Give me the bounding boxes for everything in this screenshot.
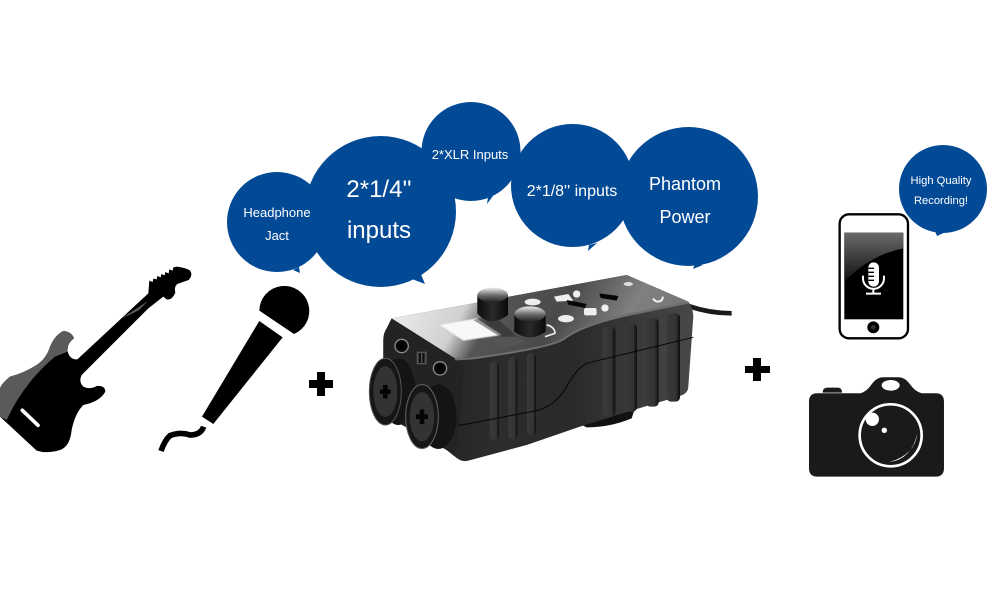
speech bubble: Phantom Power: Power [659, 207, 711, 227]
icon: camera [809, 377, 944, 477]
audio adapter device [369, 275, 732, 461]
icon: microphone [161, 286, 309, 451]
speech bubble: High Quality Recording [899, 145, 987, 236]
device body [383, 275, 693, 461]
speech bubble: Headphone Jact: Headphone [243, 205, 311, 220]
speech bubble: Phantom Power [619, 127, 758, 269]
speech bubble: 2*1/4 inputs: inputs [347, 217, 411, 244]
cable [688, 306, 732, 313]
body seam [458, 337, 693, 426]
icon: plus between adapter and devices [745, 358, 770, 381]
speech bubble: High Quality Recording: High Quality [911, 175, 972, 187]
XLR connector left [369, 358, 416, 425]
panel labels and controls [440, 282, 663, 348]
XLR connector right [406, 384, 457, 449]
icon: electric guitar [0, 267, 191, 452]
icon: plus between microphone and adapter [309, 372, 333, 396]
speech bubble: 2*1/8 inputs [511, 124, 634, 251]
front face [383, 318, 464, 457]
icon: smartphone [840, 214, 908, 338]
volume knob front [514, 306, 546, 337]
speech bubble: Headphone Jact [227, 172, 327, 273]
front panel controls [395, 339, 447, 375]
speech bubble: 2*1/8 inputs: 2*1/8'' inputs [527, 183, 617, 200]
top panel edge highlight [455, 303, 688, 359]
speech bubble: 2*XLR Inputs: 2*XLR Inputs [432, 147, 509, 162]
microphone symbol [863, 262, 884, 294]
speech bubble: Phantom Power: Phantom [649, 174, 721, 194]
volume knob back [477, 288, 508, 321]
body ribs [490, 313, 680, 440]
top panel [392, 275, 688, 358]
speech bubble: 2*XLR Inputs [422, 102, 520, 204]
speech bubble: 2*1/4 inputs [305, 136, 456, 287]
speech bubble: 2*1/4 inputs: 2*1/4'' [346, 176, 412, 203]
speech bubble: Headphone Jact: Jact [265, 228, 289, 243]
speech bubble: High Quality Recording: Recording! [914, 195, 968, 207]
device foot [580, 408, 635, 427]
